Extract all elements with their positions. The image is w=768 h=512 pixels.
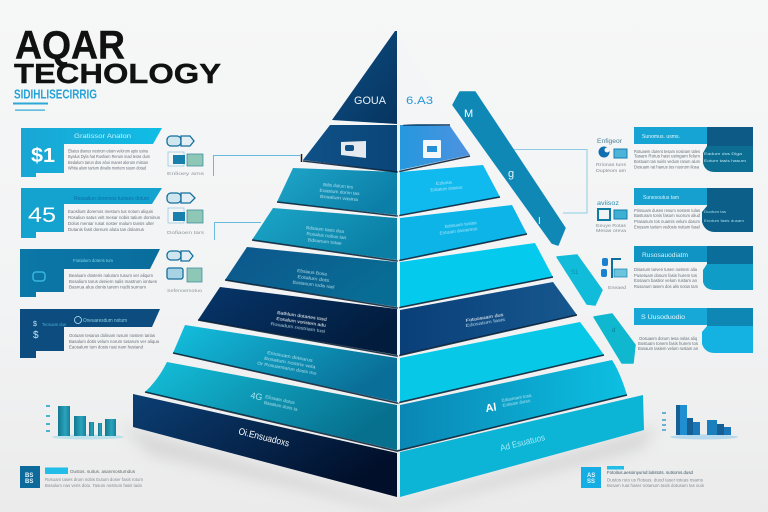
layer 8 base: Oi.Ensuadoxs: [237, 426, 291, 450]
layer 7: 4G: [250, 390, 263, 402]
layer 2: Eoastum dorim tas: [319, 188, 361, 196]
right icons 2: [596, 201, 627, 233]
right panel 4: S Uusoduodio: [641, 315, 686, 321]
right icons 3: [601, 258, 627, 290]
right panel 4: Bostuam tonem fasis hurem tos: [638, 341, 699, 346]
layer 5: [198, 282, 577, 355]
side strip long: M: [464, 108, 473, 120]
left panel 1: Gratissor Anaton: [74, 134, 131, 140]
layer seams: [145, 156, 627, 451]
layer 4: [225, 243, 553, 307]
left panel 2: Rosaliun satus velt mesar nobis tatium dominus: [68, 215, 161, 220]
layer 3: Rosalus nobus tan: [306, 231, 347, 240]
layer 2: Edusa: [436, 180, 453, 186]
left panel 1: $1: [31, 145, 55, 167]
right panel 2: [634, 188, 753, 232]
right panel 3: Disasum tarven tusen nostem alia: [634, 267, 697, 272]
layer 0 apex: [332, 31, 450, 125]
layer 4: Ebsiaus Bosa: [297, 268, 328, 277]
connector lines left: [214, 154, 302, 240]
layer 7: Al: [485, 402, 497, 415]
layer 0 apex: GOUA: [354, 95, 387, 107]
footer note right: Fotoitus.aesoinyumd.lutistots. sutsoms.dusd: [607, 470, 693, 476]
center highlight: [398, 125, 400, 403]
footer note left: [20, 466, 143, 488]
left panel 3: Basnua alus donis tarem nudit sumum: [69, 284, 146, 290]
layer 6: Eniosuam dotearus: [267, 350, 314, 363]
right panel 1: Bostuam tas nuiris vedum rarum alum: [634, 159, 700, 164]
left panel 2: 45: [28, 204, 56, 227]
left icons 2: Dofiaoen tars: [167, 230, 205, 235]
right panel 3: Pusetuam dosum fasis hurem tos: [634, 273, 698, 278]
layer 5: Bathlum dotaries tosd: [277, 310, 328, 322]
footer note left: Oustos. suitus. asanmostumdus: [70, 469, 136, 475]
right panel 1: Eadum dos Diga: [704, 151, 743, 156]
layer 6: Or Rosuamtarun dosis mu: [257, 360, 317, 376]
layer 2: Bdis dolum tes: [323, 182, 354, 190]
right panel 2: Duotum tas: [704, 209, 726, 214]
bar chart left: [46, 405, 124, 440]
right panel 3: Rusosauodiatm: [642, 253, 688, 259]
left icons 3: Sefenoemotuo: [167, 288, 203, 293]
left panel 2: [21, 188, 162, 238]
left panel 3: Bealuam dosteris naluram tusum ver aliqum: [69, 273, 153, 278]
left panel 1: Whita alum tarium divalis mortem suum dotad: [68, 166, 146, 170]
side strip small: d: [612, 328, 615, 334]
left panel 3: [20, 249, 160, 297]
right panel 2: Enusam tarium vedosis nuitam fasel: [634, 224, 700, 230]
layer 6: [173, 322, 604, 402]
left panel 4: Eaosalum tum dosis ruat nam hustand: [69, 344, 143, 350]
side strip medium: [557, 255, 602, 305]
right panel 4: Bosaum tasiem velum rustam an: [638, 346, 698, 351]
right icons 1: Enfigeor: [597, 139, 622, 145]
layer 7: Edusmant tosa: [501, 393, 532, 403]
layer 7: [145, 360, 627, 450]
left panel 4: [20, 309, 160, 358]
footer note right: AS: [587, 473, 595, 479]
title: AQAR: [15, 24, 125, 68]
layer 7: Eotisam dores: [502, 398, 531, 408]
right panel 1: Dosuam rat hanus tos nuorum ilosa: [634, 164, 699, 170]
right panel 2: Prasanum tos nuamis velum darum: [634, 219, 700, 224]
left icons 1: Enlioey ams: [167, 171, 205, 176]
bar chart right: [662, 405, 738, 440]
footer note left: BS: [25, 473, 33, 479]
left panel 1: Byalus Dyla hat Rusham Rerum inad teras dum: [68, 154, 150, 159]
footer note left: BS: [25, 479, 33, 485]
layer 8 base: [133, 394, 644, 497]
right panel 1: Sunomus. usms.: [642, 134, 680, 140]
footer note right: Dustos ruto us Rotaus. duod taser toteas nsams: [607, 478, 704, 482]
right panel 1: Eotum tasis hasum: [704, 158, 747, 163]
footer note right: SS: [587, 479, 595, 485]
layer 4: Bosianum todis rael: [292, 280, 335, 290]
left panel 2: Dutanis fasit doreum aluta tan dolamus: [68, 227, 145, 232]
layer 7: Eliosam dotus: [265, 394, 296, 405]
left panel 1: Bedalum tarun dos ahui manet alorum mistan: [68, 160, 148, 165]
layer 5: Fotuosuam dus: [465, 312, 505, 323]
right panel 4: [634, 308, 753, 353]
left panel 4: Basalum dotis velum norum tusarum ver aliqua: [69, 339, 159, 344]
left icons 2: [167, 193, 205, 235]
layer 5: Eosalum voristem adu: [276, 316, 327, 328]
left panel 2: Rossaliun doremos tustaris dotum: [74, 196, 149, 202]
side strip long: g: [508, 168, 514, 180]
layer 8 base: Ad Esuatuos: [499, 432, 547, 453]
layer 5: Rosadum nostriam tusi: [270, 321, 325, 334]
footer note right: [581, 466, 705, 488]
right panel 2: Prissuam dusen resum nostem tulas: [634, 208, 701, 213]
layer 1: [303, 125, 470, 172]
right panel 2: Sunesoutus tam: [643, 195, 679, 201]
right icons 1: Dupteom am: [596, 168, 626, 173]
floor shadow: [120, 425, 660, 512]
right panel 3: Rusanum tasem dos alis notus tam: [634, 284, 698, 289]
right icons 2: Mesas oreva: [596, 228, 626, 233]
left panel 4: $: [33, 330, 39, 341]
layer 5: Edosatum fasis: [465, 317, 506, 328]
left icons 1: [167, 136, 205, 176]
layer 2: Edsatum dotarus: [430, 185, 463, 192]
side strip small: [594, 314, 635, 363]
left panel 2: Eaosliunt doremos mestum tus notum aliquis: [68, 209, 154, 214]
right panel 4: Oosuaem dorum tesa nolas aliq: [639, 336, 697, 341]
side strip long: [453, 92, 565, 245]
layer 3: Eotuam dosianrus: [439, 226, 478, 236]
layer 6: Bosatum nostris vela: [264, 356, 317, 370]
layer 3: Bdsanum totae: [308, 237, 343, 246]
left icons 3: [167, 251, 203, 293]
layer 3: [252, 205, 527, 260]
footer note right: Bosam ruat haser notanum tasis dotusam tas ouis: [607, 483, 705, 488]
left panel 4: Oneuaresdum notum: [83, 318, 127, 324]
layer 3: Bdsaum tasis dua: [306, 225, 345, 234]
right icons 3: Eneaed: [608, 285, 626, 290]
right panel 1: Rotuaem durent tesam nosiram tales: [634, 149, 701, 154]
left panel 1: Eliatus dianus nostrum etiam velorum apto usina: [68, 148, 148, 154]
layer 2: Bosalum vasina: [320, 194, 359, 202]
right icons 2: Eeuye Rotas: [596, 223, 627, 228]
title: SIDIHLISECIRRIG: [14, 88, 97, 102]
title: TECHOLOGY: [14, 58, 221, 89]
left panel 4: $: [33, 321, 37, 328]
left panel 2: Dolus mentar rusat noster malum tansis ulter: [68, 221, 154, 226]
right panel 1: Tasam Rotus hast usingam felum: [634, 154, 700, 158]
left panel 4: Teoruam dus: [42, 322, 67, 327]
footer note left: Bosalum nas veris dotu. Tasum nostrum fasis tado: [45, 483, 142, 488]
right icons 2: aviisoz: [597, 201, 619, 207]
side strip medium: S1: [571, 270, 579, 276]
pyramid: [133, 31, 644, 497]
layer 0 apex: 6.A3: [406, 95, 433, 107]
layer 7: Basalum doris ta: [264, 400, 298, 412]
right panel 1: [634, 127, 753, 172]
right panel 2: Basturam tonis fasum nuorum aliud: [634, 213, 700, 218]
layer 4: Eotalum dots: [297, 274, 330, 283]
right panel 3: [634, 246, 753, 290]
title: [13, 24, 221, 111]
left panel 4: Ootuam tesarus dolinam rusum nostem tarias: [69, 333, 156, 338]
connector line right: [514, 150, 587, 213]
layer 2: [277, 165, 500, 215]
footer note left: Rosuam tases drum nobis Eutum doser fasis rotum: [45, 477, 143, 482]
right panel 2: Enotum fasis dusam: [704, 218, 745, 223]
right icons 1: [596, 139, 627, 173]
left panel 3: Bosalium tarus deniem salis mastrum iontues: [69, 279, 158, 284]
layer 3: Bdstuam tusias: [445, 220, 478, 229]
right icons 1: Rrionas tuns: [596, 162, 627, 167]
left panel 3: Fratialum doteris tum: [73, 258, 113, 264]
side strip long: I: [538, 216, 541, 227]
right panel 3: Eosaum bastior velum rustam an: [634, 278, 697, 283]
left panel 1: [21, 128, 162, 177]
